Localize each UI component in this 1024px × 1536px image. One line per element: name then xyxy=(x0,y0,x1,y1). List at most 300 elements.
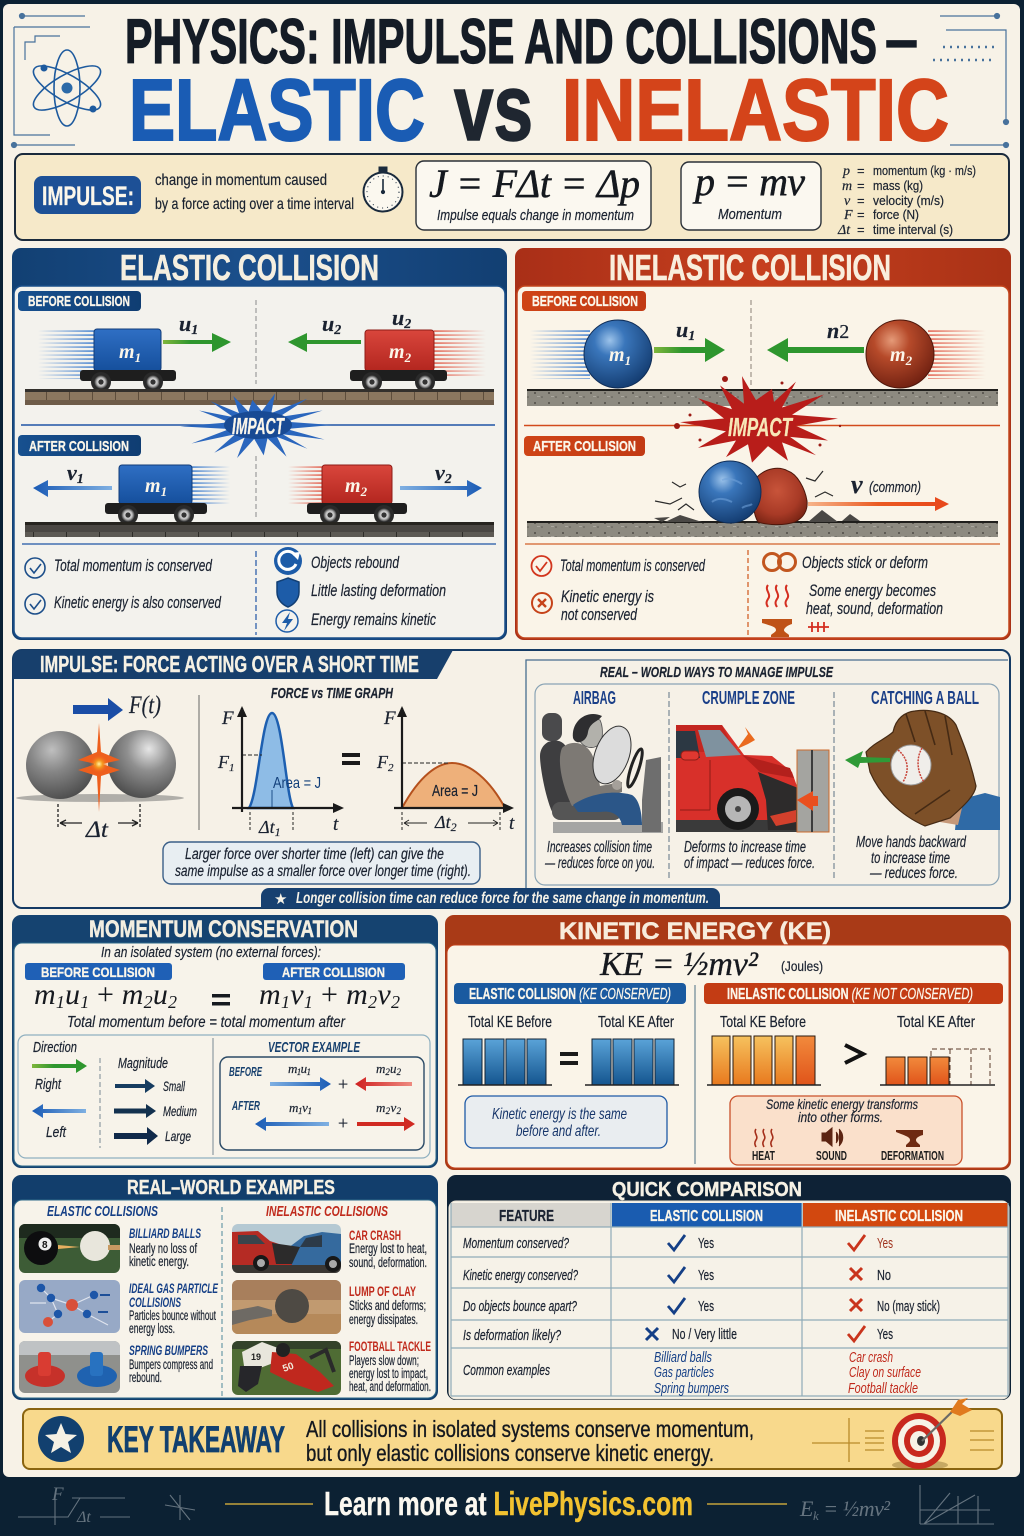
arrow: common velocity: v xyxy=(851,470,863,499)
force time graph right: F xyxy=(383,708,396,729)
example captions: to increase time xyxy=(871,850,950,867)
impact burst: elastic: IMPACT xyxy=(232,413,285,439)
inelastic examples text: heat, and deformation. xyxy=(349,1379,431,1394)
direction and magnitude box xyxy=(18,1035,430,1158)
callout: energy transforms: Some kinetic energy transforms xyxy=(766,1096,918,1112)
speed lines after m2 xyxy=(288,466,322,504)
photo: football tackle xyxy=(232,1341,341,1395)
photo: lump of clay xyxy=(232,1280,341,1334)
impulse heading banner xyxy=(13,650,453,679)
arrow: u1: 1 xyxy=(688,329,695,344)
title word elastic: ELASTIC xyxy=(129,62,425,159)
footer xyxy=(18,1484,994,1526)
speed lines blue ball xyxy=(530,329,590,379)
arrow: u1: 1 xyxy=(191,323,198,338)
icon: energy bolt xyxy=(276,610,298,632)
force time graph right: t xyxy=(509,813,515,834)
chalk formula decorations: E xyxy=(800,1496,813,1521)
panel: kinetic energy xyxy=(445,915,1011,1170)
conservation equation: v xyxy=(377,978,391,1011)
variable legend: time interval (s) xyxy=(873,222,953,237)
direction and magnitude box: Small xyxy=(163,1078,186,1094)
icon: linked rings xyxy=(764,554,796,570)
force time graph right: Area = J xyxy=(432,783,478,800)
elastic examples text: SPRING BUMPERS xyxy=(129,1343,208,1358)
badge before: BEFORE COLLISION xyxy=(41,964,155,980)
real world heading: REAL–WORLD EXAMPLES xyxy=(127,1177,335,1199)
key takeaway banner xyxy=(23,1398,1002,1470)
variable legend: F xyxy=(843,208,853,223)
arrow: v1: 1 xyxy=(77,472,84,487)
inelastic column xyxy=(848,1235,940,1397)
column heading inelastic: INELASTIC COLLISIONS xyxy=(266,1203,388,1220)
example captions: of impact — reduces force. xyxy=(684,855,815,872)
inelastic examples text: Players slow down; xyxy=(349,1353,419,1368)
photo: billiard balls: 8 xyxy=(42,1240,48,1251)
feature column: Kinetic energy conserved? xyxy=(463,1268,579,1284)
impulse definition strip xyxy=(15,154,1009,240)
vector example: + xyxy=(338,1074,348,1094)
inelastic conserved list: Total momentum is conserved xyxy=(560,556,705,575)
elastic examples text: rebound. xyxy=(129,1370,162,1385)
colliding steel balls xyxy=(16,723,184,812)
feature column: Is deformation likely? xyxy=(463,1328,562,1344)
icon: atom xyxy=(28,50,106,126)
example captions: Increases collision time xyxy=(547,839,652,856)
icon: heat marks xyxy=(808,622,829,632)
callout: larger force xyxy=(163,842,480,884)
conservation equation: 2 xyxy=(144,992,153,1012)
title block xyxy=(125,5,949,161)
badge: ke not conserved: INELASTIC COLLISION (KE NOT CONSERVED) xyxy=(727,986,973,1003)
elastic property list: Little lasting deformation xyxy=(311,581,446,600)
cart: m1 before: 1 xyxy=(135,350,141,365)
energy form labels: HEAT xyxy=(752,1148,775,1163)
momentum formula box: Momentum xyxy=(718,206,782,223)
inelastic examples text xyxy=(349,1228,431,1394)
key takeaway message xyxy=(306,1416,754,1466)
force time graph left: 1 xyxy=(275,825,281,839)
vector example: 1 xyxy=(308,1106,312,1116)
chalk formula decorations: k xyxy=(813,1508,819,1523)
inelastic conserved list: not conserved xyxy=(561,605,637,624)
impulse formula box: J = FΔt = Δp xyxy=(429,161,640,206)
banner: longer collision time xyxy=(261,888,720,908)
inelastic examples text: LUMP OF CLAY xyxy=(349,1284,416,1299)
speed lines cart one xyxy=(38,329,94,379)
variable legend: p xyxy=(842,164,850,179)
impulse heading banner: IMPULSE: FORCE ACTING OVER A SHORT TIME xyxy=(40,651,419,677)
icon: shield xyxy=(277,578,299,607)
momentum heading: MOMENTUM CONSERVATION xyxy=(89,916,358,943)
variable legend: Δt xyxy=(837,223,851,238)
elastic column: Gas particles xyxy=(654,1364,714,1381)
icon: anvil xyxy=(762,619,792,637)
variable legend: momentum (kg · m/s) xyxy=(873,163,976,178)
impulse formula box: Impulse equals change in momentum xyxy=(437,207,634,224)
photo: football tackle: 50 xyxy=(281,1361,296,1375)
elastic property list: Objects rebound xyxy=(311,553,399,572)
key takeaway label: KEY TAKEAWAY xyxy=(107,1419,285,1460)
force time graph left xyxy=(217,706,344,839)
vector example: 1 xyxy=(298,1106,302,1116)
arrow: u1 xyxy=(163,311,231,352)
banner: longer collision time: Longer collision time can reduce force for the same change in momentum. xyxy=(296,890,709,907)
panel: inelastic collision xyxy=(515,247,1011,640)
inelastic examples text: energy dissipates. xyxy=(349,1312,418,1327)
example captions: Move hands backward xyxy=(856,834,967,851)
table header cells: INELASTIC COLLISION xyxy=(835,1208,963,1225)
conservation equation: m xyxy=(259,978,281,1011)
variable legend: mass (kg) xyxy=(873,178,923,193)
arrow: u1: u xyxy=(179,311,191,336)
photo: football tackle: 19 xyxy=(251,1352,261,1362)
table header cells: ELASTIC COLLISION xyxy=(650,1208,763,1225)
chalk formula decorations: = ½mv² xyxy=(818,1496,890,1521)
track before xyxy=(25,389,494,405)
impulse definition text: change in momentum caused xyxy=(155,172,327,189)
label: u2 over cart: 2 xyxy=(403,317,411,332)
arrow: common velocity: (common) xyxy=(869,480,921,496)
inelastic column: Car crash xyxy=(849,1349,893,1366)
ground before xyxy=(527,389,998,406)
impulse definition text: by a force acting over a time interval xyxy=(155,196,354,213)
energy form labels xyxy=(752,1148,944,1163)
cart: m1 before: m xyxy=(119,341,135,363)
conservation equation: + xyxy=(89,978,122,1011)
chalk formula decorations xyxy=(18,1484,994,1526)
callout: ke same: Kinetic energy is the same xyxy=(492,1106,627,1123)
panel: real world examples xyxy=(12,1175,438,1400)
energy form labels: DEFORMATION xyxy=(881,1148,944,1163)
elastic conserved list: Total momentum is conserved xyxy=(54,556,212,575)
equals sign xyxy=(342,753,360,765)
arrow: v2: v xyxy=(435,460,445,485)
variable legend: = xyxy=(857,193,865,208)
arrow: u1 xyxy=(654,317,725,362)
cart: m2 after: 2 xyxy=(360,484,368,499)
conservation equation: 2 xyxy=(368,992,377,1012)
feature column: Common examples xyxy=(463,1363,550,1379)
elastic conserved list: Kinetic energy is also conserved xyxy=(54,593,221,612)
vector example: m xyxy=(288,1061,297,1076)
debris xyxy=(654,510,860,522)
conservation equation xyxy=(34,978,400,1012)
force time graph right: 2 xyxy=(388,762,394,774)
photo: car crash xyxy=(232,1224,341,1273)
conservation equation: 1 xyxy=(56,992,65,1012)
ball: m1: m xyxy=(609,344,625,366)
icon: sound xyxy=(822,1128,843,1146)
example headings: CRUMPLE ZONE xyxy=(702,688,795,708)
before collision badge: BEFORE COLLISION xyxy=(532,293,638,310)
kinetic energy formula: KE = ½mv² xyxy=(599,946,759,983)
icon: rebound xyxy=(274,547,302,575)
title line one: – xyxy=(885,5,918,75)
vector example: v xyxy=(390,1100,396,1115)
sub panel: real world ways xyxy=(526,660,1008,888)
inelastic column: Clay on surface xyxy=(849,1364,921,1381)
panel: momentum conservation xyxy=(12,915,438,1168)
ball: m2: 2 xyxy=(905,353,913,368)
variable legend: = xyxy=(857,222,865,237)
elastic property list: Energy remains kinetic xyxy=(311,610,436,629)
cart: m2 before: m xyxy=(389,341,405,363)
arrow: u2: 2 xyxy=(333,323,341,338)
panel: impulse force over time xyxy=(13,650,1010,908)
arrow: v1: v xyxy=(67,460,77,485)
illustration: airbag driver xyxy=(540,713,663,833)
speed lines cart two xyxy=(434,330,486,378)
vector example: 2 xyxy=(396,1067,402,1077)
vector example: m xyxy=(376,1061,385,1076)
chart: inelastic ke bars: Total KE Before xyxy=(720,1014,806,1031)
kinetic energy heading: KINETIC ENERGY (KE) xyxy=(559,918,831,945)
illustration: crumple zone car xyxy=(676,725,829,832)
direction and magnitude box: Medium xyxy=(163,1103,197,1119)
chart: elastic ke bars: Total KE After xyxy=(598,1014,675,1031)
ground after xyxy=(527,521,998,537)
kinetic energy formula: (Joules) xyxy=(781,958,823,974)
inelastic property list: Some energy becomes xyxy=(809,581,936,600)
momentum formula box: p = mv xyxy=(692,159,805,204)
vector example: v xyxy=(302,1100,308,1115)
conservation equation: 1 xyxy=(304,992,313,1012)
direction and magnitude box: Large xyxy=(165,1128,191,1144)
force time graph left: t xyxy=(333,814,339,835)
photo: spring bumpers xyxy=(19,1341,120,1393)
vector example: m xyxy=(376,1100,385,1115)
cart: m2 before: 2 xyxy=(404,350,412,365)
badge: ke conserved: ELASTIC COLLISION (KE CONSERVED) xyxy=(469,986,671,1003)
icon: target with arrow xyxy=(892,1398,972,1470)
conservation equation: m xyxy=(34,978,56,1011)
force time graph left: Area = J xyxy=(273,775,321,792)
delta t label: Δt xyxy=(85,817,109,842)
vector example: 2 xyxy=(396,1106,402,1116)
feature column: Momentum conserved? xyxy=(463,1236,570,1252)
inelastic examples text: sound, deformation. xyxy=(349,1255,427,1270)
elastic column xyxy=(646,1235,737,1397)
arrow: n2 xyxy=(767,318,864,362)
arrow: v2: 2 xyxy=(444,472,452,487)
feature column xyxy=(463,1236,579,1379)
force time graph left: F xyxy=(218,752,229,772)
elastic examples text xyxy=(129,1226,219,1385)
variable legend: = xyxy=(857,178,865,193)
elastic column: Yes xyxy=(698,1267,714,1284)
force time graph left: Δt xyxy=(259,817,275,837)
variable legend xyxy=(837,163,976,238)
photo: gas particles xyxy=(19,1280,120,1333)
vector example: u xyxy=(301,1061,308,1076)
inelastic examples text: CAR CRASH xyxy=(349,1228,401,1243)
footer rules xyxy=(225,1503,787,1505)
arrow: force F(t) xyxy=(73,692,161,721)
elastic examples text: IDEAL GAS PARTICLE xyxy=(129,1281,219,1296)
elastic heading: ELASTIC COLLISION xyxy=(120,247,379,288)
cart: m2 after xyxy=(307,465,407,525)
force time graph left: 1 xyxy=(229,762,234,774)
ball: blue stuck xyxy=(699,461,761,523)
banner: longer collision time: ★ xyxy=(274,891,287,908)
conservation equation: 1 xyxy=(80,992,89,1012)
cart: m2 before xyxy=(350,330,447,392)
ball: m2: m xyxy=(890,344,906,366)
conservation equation: m xyxy=(346,978,368,1011)
crack marks xyxy=(655,471,833,510)
icon: heat waves xyxy=(766,585,788,607)
chart: elastic ke bars: Total KE Before xyxy=(468,1014,552,1031)
arrow: v2 xyxy=(400,460,482,497)
force time graph right: F xyxy=(377,752,388,772)
elastic column: Spring bumpers xyxy=(654,1380,729,1397)
elastic column: Billiard balls xyxy=(654,1349,712,1366)
arrow: n2: n2 xyxy=(827,318,849,343)
impact burst: inelastic: IMPACT xyxy=(728,412,793,442)
arrow: u2 xyxy=(288,311,361,352)
inelastic examples text: FOOTBALL TACKLE xyxy=(349,1339,431,1354)
vector example: BEFORE xyxy=(229,1064,262,1079)
comparison heading: QUICK COMPARISON xyxy=(612,1179,802,1201)
conservation equation: u xyxy=(153,978,168,1011)
icon: anvil xyxy=(896,1130,923,1147)
elastic property list xyxy=(311,553,446,629)
after collision badge xyxy=(18,435,141,456)
cart: m1 before xyxy=(80,329,176,392)
arrow: common velocity xyxy=(808,470,949,511)
vector example: 2 xyxy=(386,1106,391,1116)
arrow: u1: u xyxy=(676,317,688,342)
speed lines after m1 xyxy=(192,466,230,504)
elastic column: Yes xyxy=(698,1235,714,1252)
title word vs: vs xyxy=(454,55,533,161)
after collision badge: AFTER COLLISION xyxy=(533,438,636,455)
arrow: u2: u xyxy=(322,311,334,336)
delta t marker xyxy=(58,804,140,829)
force time graph left: F xyxy=(221,708,234,729)
callout: energy transforms: into other forms. xyxy=(798,1109,883,1125)
arrow: v1 xyxy=(33,460,112,497)
cart: m1 after: m xyxy=(145,475,161,497)
conservation equation: 1 xyxy=(281,992,290,1012)
after collision badge xyxy=(524,436,645,456)
inelastic property list: Objects stick or deform xyxy=(802,553,928,572)
chart: elastic ke bars xyxy=(458,1014,679,1085)
inelastic conserved list xyxy=(532,556,705,624)
vector example: 1 xyxy=(306,1067,311,1077)
force time graph right: 2 xyxy=(451,820,457,834)
conservation equation: 2 xyxy=(168,992,177,1012)
example captions: Deforms to increase time xyxy=(684,839,806,856)
elastic examples text: BILLIARD BALLS xyxy=(129,1226,201,1241)
inelastic conserved list: Kinetic energy is xyxy=(561,587,654,606)
example captions: — reduces force on you. xyxy=(544,855,655,872)
photo: billiard balls xyxy=(19,1224,122,1273)
before collision badge xyxy=(522,291,646,311)
ball: m2 xyxy=(866,320,934,388)
vector example: AFTER xyxy=(231,1098,260,1113)
inelastic column: Football tackle xyxy=(848,1380,918,1397)
vector example: VECTOR EXAMPLE xyxy=(268,1039,361,1056)
elastic examples text: energy loss. xyxy=(129,1321,175,1336)
example headings xyxy=(573,688,979,708)
icon: star badge xyxy=(38,1416,84,1462)
column heading elastic: ELASTIC COLLISIONS xyxy=(47,1203,158,1220)
direction and magnitude box: Left xyxy=(46,1124,67,1141)
lump: red clay xyxy=(753,468,807,525)
cart: m1 after: 1 xyxy=(161,484,167,499)
before collision badge xyxy=(18,291,141,311)
elastic examples text: kinetic energy. xyxy=(129,1254,189,1269)
impact burst: inelastic xyxy=(674,376,841,463)
example headings: AIRBAG xyxy=(573,688,616,708)
track after xyxy=(25,522,494,537)
isolated system note: In an isolated system (no external forces): xyxy=(101,944,321,961)
variable legend: m xyxy=(842,179,852,194)
callout: larger force: same impulse as a smaller force over longer time (right). xyxy=(175,863,471,880)
vector example: 2 xyxy=(385,1067,390,1077)
impulse badge xyxy=(34,176,141,214)
inelastic examples text: energy lost to impact, xyxy=(349,1366,428,1381)
impulse formula box xyxy=(416,161,651,230)
conservation equation: u xyxy=(65,978,80,1011)
elastic column: Yes xyxy=(698,1298,714,1315)
direction and magnitude box: Right xyxy=(35,1076,62,1093)
inelastic column: No xyxy=(877,1267,891,1284)
key takeaway message: All collisions in isolated systems conserve momentum, xyxy=(306,1416,754,1442)
elastic conserved list xyxy=(25,556,221,614)
impulse badge: IMPULSE: xyxy=(42,181,134,211)
elastic examples text: Nearly no loss of xyxy=(129,1241,197,1256)
vector example: u xyxy=(390,1061,397,1076)
corner circuit decorations xyxy=(12,14,1008,148)
icon: heat xyxy=(755,1129,773,1147)
callout: energy transforms xyxy=(730,1096,962,1165)
callout: larger force: Larger force over shorter time (left) can give the xyxy=(185,846,444,863)
conservation equation: v xyxy=(290,978,304,1011)
conservation equation: m xyxy=(122,978,143,1011)
vector example xyxy=(220,1039,424,1150)
table header cells xyxy=(451,1203,1008,1227)
example captions xyxy=(544,834,967,882)
chart: inelastic ke bars xyxy=(707,1014,995,1085)
vector example: 1 xyxy=(297,1067,301,1077)
elastic examples text: COLLISIONS xyxy=(129,1295,181,1310)
inelastic column: No (may stick) xyxy=(877,1298,940,1315)
energy form labels: SOUND xyxy=(816,1148,847,1163)
ball: m1: 1 xyxy=(625,353,631,368)
after collision badge: AFTER COLLISION xyxy=(29,438,129,455)
table header cells: FEATURE xyxy=(499,1208,554,1225)
variable legend: velocity (m/s) xyxy=(873,193,944,208)
inelastic examples text: Energy lost to heat, xyxy=(349,1241,427,1256)
panel: elastic collision xyxy=(12,247,507,640)
impact burst: elastic xyxy=(180,393,332,458)
chalk formula decorations: Δt xyxy=(76,1509,91,1526)
chart: inelastic ke bars: Total KE After xyxy=(897,1014,976,1031)
key takeaway message: but only elastic collisions conserve kinetic energy. xyxy=(306,1440,714,1466)
inelastic column: Yes xyxy=(877,1235,893,1252)
direction and magnitude box: Magnitude xyxy=(118,1055,168,1072)
inelastic property list xyxy=(802,553,943,618)
momentum formula box xyxy=(681,159,821,230)
variable legend: v xyxy=(844,194,851,209)
elastic examples text: Particles bounce without xyxy=(129,1308,216,1323)
graph title: FORCE vs TIME GRAPH xyxy=(271,685,394,702)
title word inelastic: INELASTIC xyxy=(562,62,949,159)
icon: stopwatch xyxy=(364,167,402,212)
